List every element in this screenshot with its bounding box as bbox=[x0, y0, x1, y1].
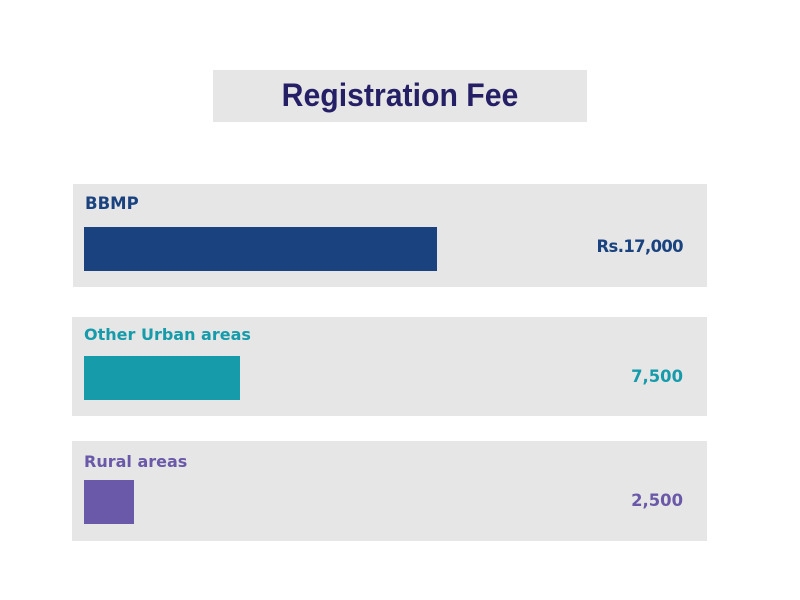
bar: Rural areas bbox=[84, 480, 134, 524]
panel: Rural areas bbox=[72, 441, 707, 541]
label: Rural areas: Rural areas bbox=[84, 452, 187, 471]
value: BBMP: Rs.17,000 bbox=[597, 237, 683, 256]
bar: BBMP bbox=[84, 227, 437, 271]
panel: Other Urban areas bbox=[72, 317, 707, 416]
bar: Other Urban areas bbox=[84, 356, 240, 400]
value: Other Urban areas: 7,500 bbox=[631, 367, 683, 386]
title: Registration Fee bbox=[282, 77, 518, 113]
value: Rural areas: 2,500 bbox=[631, 491, 683, 510]
label: Other Urban areas: Other Urban areas bbox=[84, 325, 251, 344]
label: BBMP: BBMP bbox=[85, 194, 139, 213]
title panel bbox=[213, 70, 587, 122]
panel: BBMP bbox=[73, 184, 707, 287]
